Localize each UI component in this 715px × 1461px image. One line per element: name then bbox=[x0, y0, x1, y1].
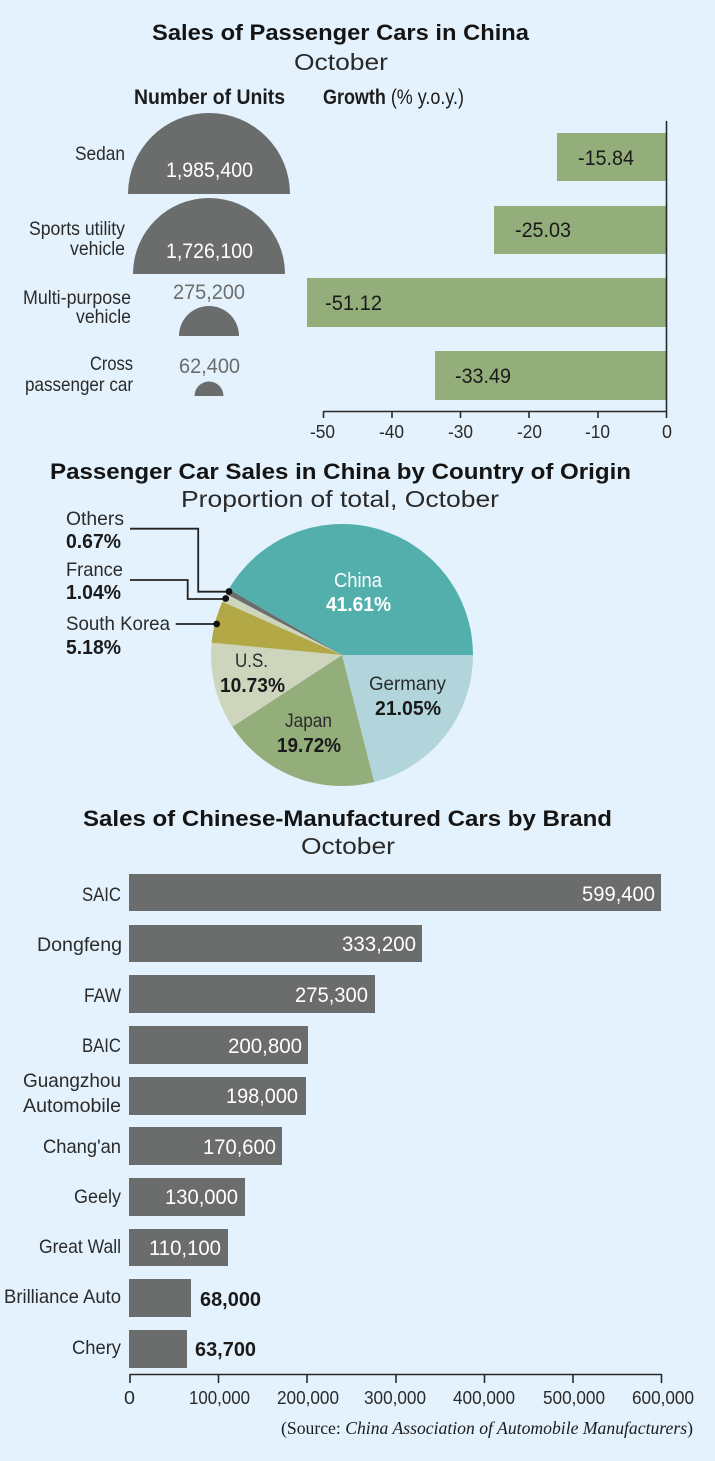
bar: Dongfeng: Dongfeng bbox=[37, 934, 122, 956]
section: sales by brand bbox=[4, 806, 694, 1439]
sedan row: 1,985,400 bbox=[166, 159, 253, 182]
bar: Brilliance Auto bbox=[4, 1279, 261, 1317]
slice: China bbox=[229, 524, 473, 655]
sports utility vehicle row: 1,726,100 bbox=[166, 240, 253, 263]
bar: sedan growth: -15.84 bbox=[578, 147, 634, 170]
bar: Geely: 130,000 bbox=[165, 1186, 238, 1209]
bar: Guangzhou Automobile: Guangzhou bbox=[23, 1070, 121, 1092]
bar: Brilliance Auto: Brilliance Auto bbox=[4, 1286, 121, 1308]
brand axis: 100,000 bbox=[189, 1387, 250, 1408]
callout: Others: 0.67% bbox=[66, 530, 121, 553]
bar: FAW: FAW bbox=[84, 985, 122, 1007]
callout: Others bbox=[66, 508, 232, 595]
bar: Chery: 63,700 bbox=[195, 1338, 256, 1361]
slice: U.S. bbox=[211, 643, 342, 727]
bar: Geely: Geely bbox=[74, 1186, 121, 1208]
cross passenger car row bbox=[25, 353, 240, 396]
brand axis: 0 bbox=[124, 1387, 135, 1408]
slice: Germany bbox=[342, 655, 473, 782]
subtitle: Proportion of total, October bbox=[181, 486, 499, 512]
bar: sedan growth bbox=[557, 133, 666, 181]
growth axis: -20 bbox=[517, 421, 542, 442]
bar chart: brands bbox=[4, 874, 694, 1408]
bar: SAIC bbox=[82, 874, 661, 911]
brand axis: 500,000 bbox=[543, 1387, 605, 1408]
growth axis: -10 bbox=[585, 421, 610, 442]
source note: (Source: China Association of Automobile Manufacturers) bbox=[281, 1418, 693, 1439]
growth axis: -50 bbox=[310, 421, 335, 442]
multi-purpose vehicle row: 275,200 bbox=[173, 281, 245, 304]
cross passenger car row: 62,400 bbox=[179, 355, 240, 378]
label: U.S.: U.S. bbox=[235, 650, 268, 672]
sports utility vehicle row bbox=[29, 198, 285, 274]
label: Germany: 21.05% bbox=[375, 697, 441, 720]
slice: Japan bbox=[232, 655, 374, 786]
bar: Brilliance Auto: 68,000 bbox=[200, 1288, 261, 1311]
heading: number of units: Number of Units bbox=[134, 86, 285, 109]
title: Sales of Passenger Cars in China bbox=[152, 20, 530, 45]
bar: BAIC: BAIC bbox=[82, 1035, 121, 1057]
cross passenger car row: Cross bbox=[90, 353, 133, 375]
bar: Guangzhou Automobile: 198,000 bbox=[226, 1085, 298, 1108]
brand axis: 600,000 bbox=[632, 1387, 694, 1408]
bar chart: growth bbox=[307, 121, 672, 442]
callout: Others: Others bbox=[66, 508, 124, 530]
callout: France bbox=[66, 559, 229, 604]
brand axis bbox=[124, 1374, 694, 1408]
bar: BAIC bbox=[82, 1026, 308, 1064]
sedan row bbox=[75, 113, 290, 194]
bar: Chery: Chery bbox=[72, 1337, 121, 1359]
semicircle chart: number of units bbox=[23, 113, 290, 396]
sports utility vehicle row: Sports utility bbox=[29, 218, 125, 240]
bar: Geely bbox=[74, 1178, 245, 1216]
bar: Great Wall: 110,100 bbox=[149, 1237, 221, 1260]
multi-purpose vehicle row: Multi-purpose bbox=[23, 287, 131, 309]
subtitle: October bbox=[294, 49, 388, 75]
growth axis: 0 bbox=[662, 421, 672, 442]
title: Sales of Chinese-Manufactured Cars by Brand bbox=[83, 806, 612, 831]
section: country of origin bbox=[50, 459, 631, 786]
label: U.S.: 10.73% bbox=[220, 674, 285, 697]
bar: SAIC: 599,400 bbox=[582, 883, 655, 906]
label: China bbox=[326, 570, 391, 616]
brand axis: 200,000 bbox=[277, 1387, 339, 1408]
bar: Dongfeng: 333,200 bbox=[342, 933, 416, 956]
bar: Great Wall: Great Wall bbox=[39, 1236, 121, 1258]
bar: cross passenger car growth: -33.49 bbox=[455, 365, 511, 388]
subtitle: October bbox=[301, 833, 395, 859]
multi-purpose vehicle row: vehicle bbox=[76, 306, 131, 328]
bar: Chang'an: Chang'an bbox=[43, 1136, 121, 1158]
bar: Guangzhou Automobile: Automobile bbox=[23, 1095, 121, 1117]
growth axis: -30 bbox=[448, 421, 473, 442]
slice: South Korea bbox=[212, 602, 342, 655]
growth axis: -40 bbox=[379, 421, 404, 442]
slice: Others bbox=[226, 589, 342, 655]
bar: MPV growth bbox=[307, 278, 666, 327]
heading: growth: Growth (% y.o.y.) bbox=[323, 86, 464, 109]
brand axis: 300,000 bbox=[364, 1387, 426, 1408]
bar: FAW bbox=[84, 975, 375, 1013]
section: sales of passenger cars bbox=[23, 20, 672, 442]
multi-purpose vehicle row bbox=[23, 281, 245, 336]
label: China: 41.61% bbox=[326, 593, 391, 616]
bar: SUV growth bbox=[494, 206, 666, 254]
bar: SAIC: SAIC bbox=[82, 884, 121, 906]
bar: MPV growth: -51.12 bbox=[325, 292, 382, 315]
sedan row: Sedan bbox=[75, 143, 125, 165]
label: Japan: 19.72% bbox=[277, 734, 341, 757]
cross passenger car row: passenger car bbox=[25, 374, 133, 396]
label: Japan: Japan bbox=[285, 710, 332, 732]
bar: cross passenger car growth bbox=[435, 351, 666, 400]
label: U.S. bbox=[220, 650, 285, 697]
bar: Great Wall bbox=[39, 1229, 228, 1266]
callout: France: France bbox=[66, 559, 123, 581]
title: Passenger Car Sales in China by Country of Origin bbox=[50, 459, 631, 484]
callout: France: 1.04% bbox=[66, 581, 121, 604]
pie chart bbox=[211, 524, 473, 786]
callout: South Korea: 5.18% bbox=[66, 636, 121, 659]
sports utility vehicle row: vehicle bbox=[70, 238, 125, 260]
bar: Dongfeng bbox=[37, 925, 422, 962]
bar: FAW: 275,300 bbox=[295, 984, 368, 1007]
bar: Guangzhou Automobile bbox=[23, 1070, 306, 1117]
label: Japan bbox=[277, 710, 341, 757]
bar: SUV growth: -25.03 bbox=[515, 219, 571, 242]
brand axis: 400,000 bbox=[453, 1387, 515, 1408]
label: Germany: Germany bbox=[369, 673, 446, 695]
callout: South Korea: South Korea bbox=[66, 613, 170, 635]
slice: France bbox=[222, 594, 342, 655]
label: Germany bbox=[369, 673, 446, 720]
bar: BAIC: 200,800 bbox=[228, 1035, 302, 1058]
bar: Chery bbox=[72, 1330, 256, 1368]
callout: South Korea bbox=[66, 613, 220, 659]
bar: Chang'an bbox=[43, 1127, 282, 1165]
growth axis bbox=[310, 121, 672, 442]
label: China: China bbox=[334, 570, 383, 592]
bar: Chang'an: 170,600 bbox=[203, 1136, 276, 1159]
